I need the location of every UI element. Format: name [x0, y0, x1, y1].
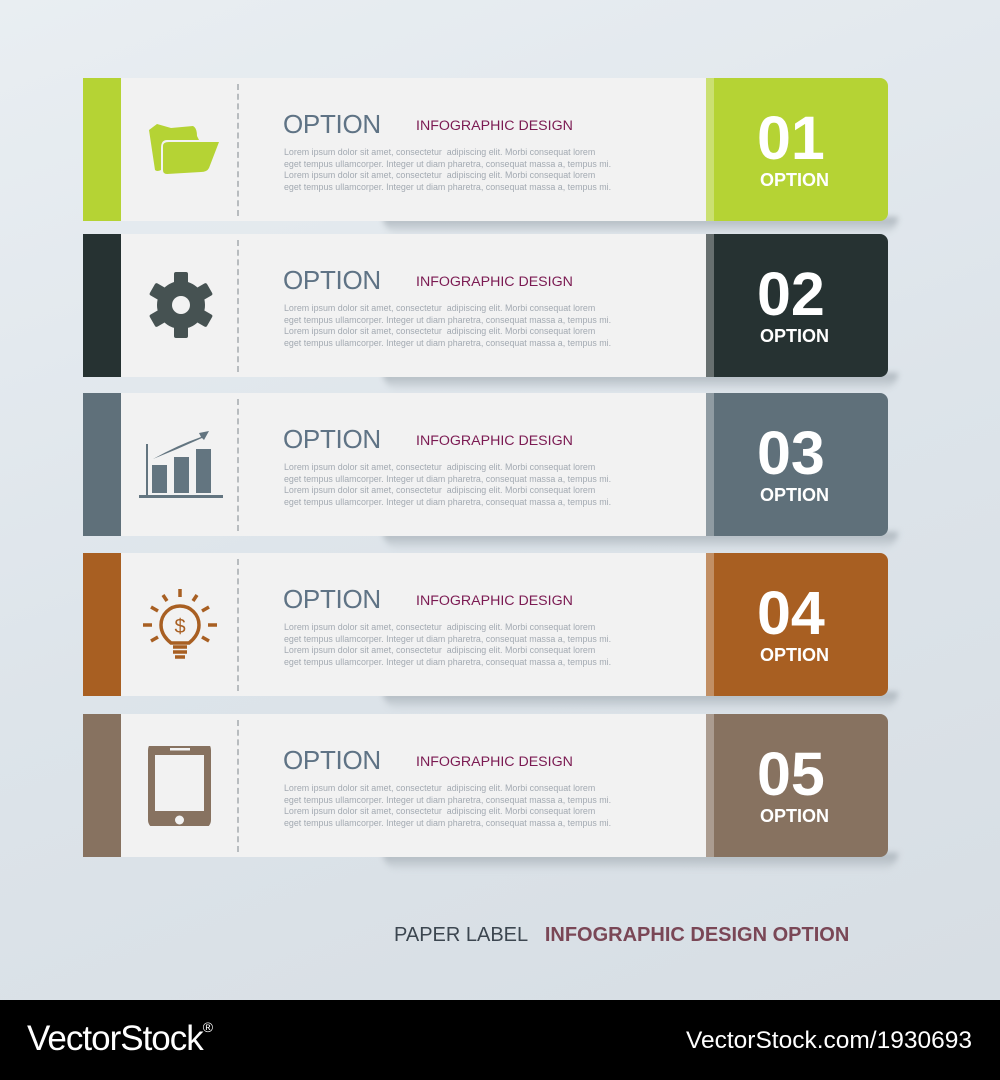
text block — [284, 783, 611, 828]
row 1: INFOGRAPHIC DESIGN — [416, 118, 573, 134]
number tab — [706, 78, 888, 221]
text block: Lorem ipsum dolor sit amet, consectetur adipiscing elit. Morbi consequat lorem — [284, 170, 595, 180]
row 2: OPTION — [760, 326, 829, 346]
text block: eget tempus ullamcorper. Integer ut diam pharetra, consequat massa a, tempus mi. — [284, 818, 611, 828]
text block — [284, 147, 611, 192]
footer: VectorStock.com/1930693 — [686, 1027, 972, 1054]
text block: Lorem ipsum dolor sit amet, consectetur adipiscing elit. Morbi consequat lorem — [284, 645, 595, 655]
text block: Lorem ipsum dolor sit amet, consectetur adipiscing elit. Morbi consequat lorem — [284, 485, 595, 495]
icon: gear — [150, 272, 212, 338]
text block: eget tempus ullamcorper. Integer ut diam pharetra, consequat massa a, tempus mi. — [284, 497, 611, 507]
text block — [284, 303, 611, 348]
row 1: OPTION — [760, 170, 829, 190]
row 3: INFOGRAPHIC DESIGN — [416, 433, 573, 449]
row 4: 04 — [757, 579, 825, 647]
row 3: OPTION — [760, 485, 829, 505]
row 4: INFOGRAPHIC DESIGN — [416, 593, 573, 609]
icon: lightbulb — [143, 589, 217, 659]
row 2: 02 — [757, 260, 825, 328]
icon: folder — [149, 124, 219, 174]
heading: OPTION — [283, 584, 381, 614]
number tab — [706, 714, 888, 857]
icon: lightbulb: $ — [174, 616, 186, 638]
footer: VectorStock® — [27, 1019, 212, 1058]
icon: phone — [148, 746, 211, 826]
icon: bar chart — [139, 431, 223, 498]
text block: eget tempus ullamcorper. Integer ut diam pharetra, consequat massa a, tempus mi. — [284, 795, 611, 805]
text block: Lorem ipsum dolor sit amet, consectetur adipiscing elit. Morbi consequat lorem — [284, 806, 595, 816]
heading: OPTION — [283, 424, 381, 454]
row 5 — [83, 714, 900, 868]
row 1: 01 — [757, 104, 825, 172]
text block: Lorem ipsum dolor sit amet, consectetur adipiscing elit. Morbi consequat lorem — [284, 622, 595, 632]
text block: eget tempus ullamcorper. Integer ut diam pharetra, consequat massa a, tempus mi. — [284, 474, 611, 484]
row 5: 05 — [757, 740, 825, 808]
text block — [284, 622, 611, 667]
row 3 — [83, 393, 900, 548]
row 2: INFOGRAPHIC DESIGN — [416, 274, 573, 290]
heading: OPTION — [283, 109, 381, 139]
text block: eget tempus ullamcorper. Integer ut diam pharetra, consequat massa a, tempus mi. — [284, 315, 611, 325]
text block: eget tempus ullamcorper. Integer ut diam pharetra, consequat massa a, tempus mi. — [284, 657, 611, 667]
row 2 — [83, 234, 900, 388]
footer — [0, 1000, 1000, 1080]
heading: OPTION — [283, 745, 381, 775]
row 4 — [83, 553, 900, 708]
row 5: OPTION — [760, 806, 829, 826]
text block: eget tempus ullamcorper. Integer ut diam pharetra, consequat massa a, tempus mi. — [284, 634, 611, 644]
number tab — [706, 234, 888, 377]
text block: Lorem ipsum dolor sit amet, consectetur adipiscing elit. Morbi consequat lorem — [284, 147, 595, 157]
text block: Lorem ipsum dolor sit amet, consectetur adipiscing elit. Morbi consequat lorem — [284, 462, 595, 472]
row 5: INFOGRAPHIC DESIGN — [416, 754, 573, 770]
row 3: 03 — [757, 419, 825, 487]
text block: eget tempus ullamcorper. Integer ut diam pharetra, consequat massa a, tempus mi. — [284, 159, 611, 169]
text block: eget tempus ullamcorper. Integer ut diam pharetra, consequat massa a, tempus mi. — [284, 182, 611, 192]
heading: OPTION — [283, 265, 381, 295]
text block — [284, 462, 611, 507]
number tab — [706, 393, 888, 536]
text block: eget tempus ullamcorper. Integer ut diam pharetra, consequat massa a, tempus mi. — [284, 338, 611, 348]
row 4: OPTION — [760, 645, 829, 665]
text block: Lorem ipsum dolor sit amet, consectetur adipiscing elit. Morbi consequat lorem — [284, 783, 595, 793]
text block: Lorem ipsum dolor sit amet, consectetur adipiscing elit. Morbi consequat lorem — [284, 326, 595, 336]
text block: Lorem ipsum dolor sit amet, consectetur adipiscing elit. Morbi consequat lorem — [284, 303, 595, 313]
row 1 — [83, 78, 900, 233]
number tab — [706, 553, 888, 696]
caption: PAPER LABEL INFOGRAPHIC DESIGN OPTION — [394, 924, 849, 946]
